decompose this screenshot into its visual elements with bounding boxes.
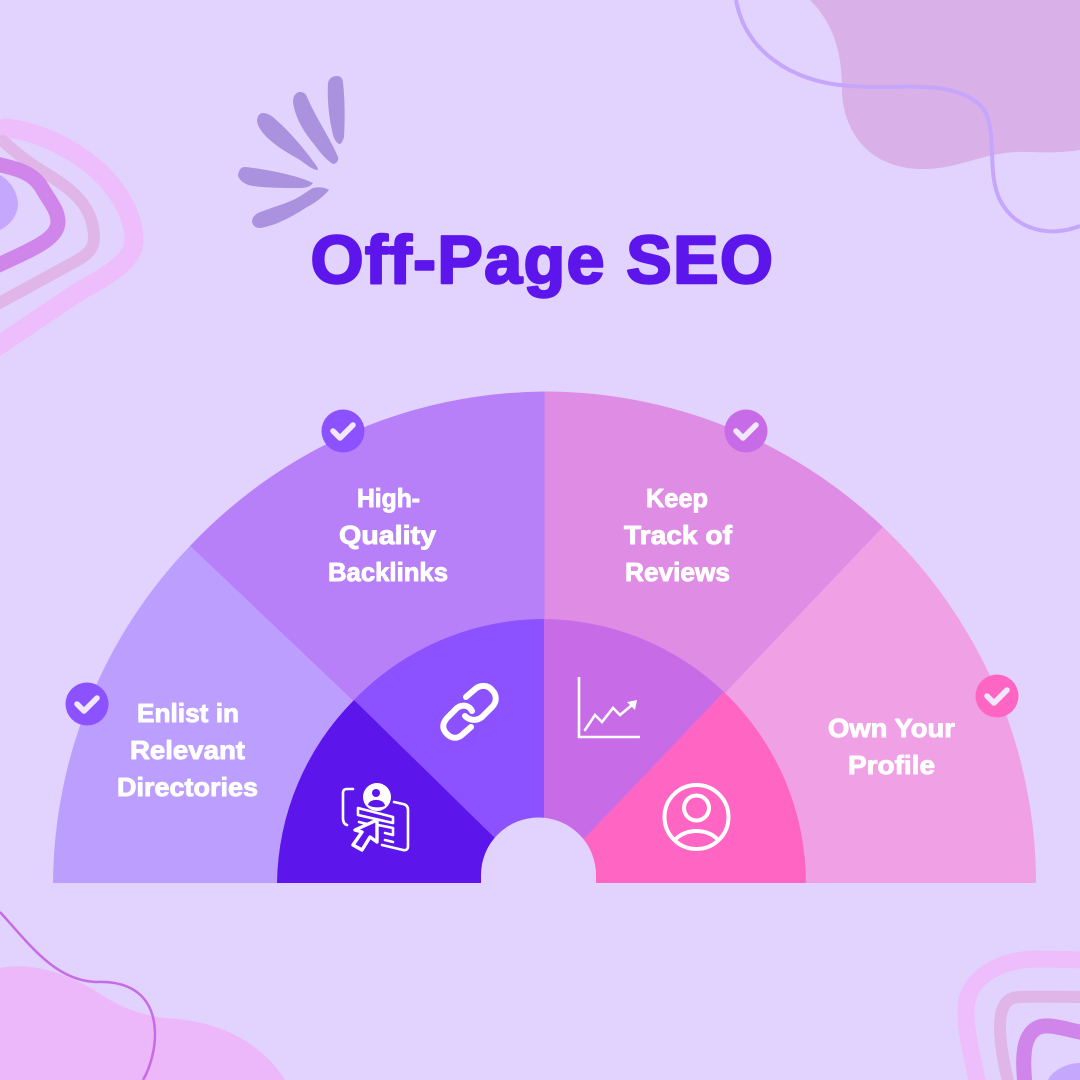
decoration: top-right blob bbox=[736, 0, 1080, 231]
segment: reviews outer bbox=[544, 392, 883, 883]
check badge: enlist bbox=[66, 682, 108, 726]
label: backlinks: High- bbox=[357, 483, 420, 513]
decoration: bottom-left blob bbox=[0, 912, 285, 1080]
segment: backlinks inner bbox=[354, 619, 544, 860]
decoration: left concentric rings bbox=[0, 128, 134, 350]
label: backlinks bbox=[328, 483, 448, 587]
label: reviews: Keep bbox=[646, 483, 708, 513]
semicircle chart bbox=[53, 392, 1036, 883]
check badge: reviews bbox=[724, 410, 768, 452]
label: profile: Profile bbox=[848, 750, 935, 780]
decoration: bottom-right concentric rings bbox=[966, 959, 1080, 1080]
label: enlist: Enlist in bbox=[137, 698, 239, 728]
check badge: backlinks bbox=[322, 410, 364, 452]
segment: reviews inner bbox=[544, 619, 724, 860]
title: Off-Page SEO bbox=[311, 222, 774, 298]
label: enlist bbox=[117, 698, 258, 802]
label: reviews: Track of bbox=[624, 520, 732, 550]
label: reviews: Reviews bbox=[625, 557, 730, 587]
segment: enlist outer bbox=[53, 546, 544, 883]
segment: backlinks outer bbox=[190, 392, 544, 883]
label: profile bbox=[828, 713, 955, 780]
label: enlist: Directories bbox=[117, 772, 258, 802]
label: backlinks: Backlinks bbox=[328, 557, 448, 587]
icon: chain link bbox=[443, 686, 496, 738]
label: reviews bbox=[624, 483, 732, 587]
check badge: profile bbox=[976, 674, 1018, 718]
icon: line chart bbox=[579, 677, 640, 737]
decoration: sparkle burst bbox=[238, 76, 345, 228]
icon: user profile circle bbox=[664, 785, 728, 849]
segment: profile inner bbox=[580, 692, 806, 883]
label: profile: Own Your bbox=[828, 713, 955, 743]
segment: enlist inner bbox=[277, 700, 500, 883]
icon: directory listing with cursor bbox=[343, 783, 408, 850]
segment: profile outer bbox=[544, 527, 1036, 883]
center hub bbox=[481, 818, 596, 883]
label: enlist: Relevant bbox=[130, 735, 245, 765]
label: backlinks: Quality bbox=[339, 520, 437, 550]
